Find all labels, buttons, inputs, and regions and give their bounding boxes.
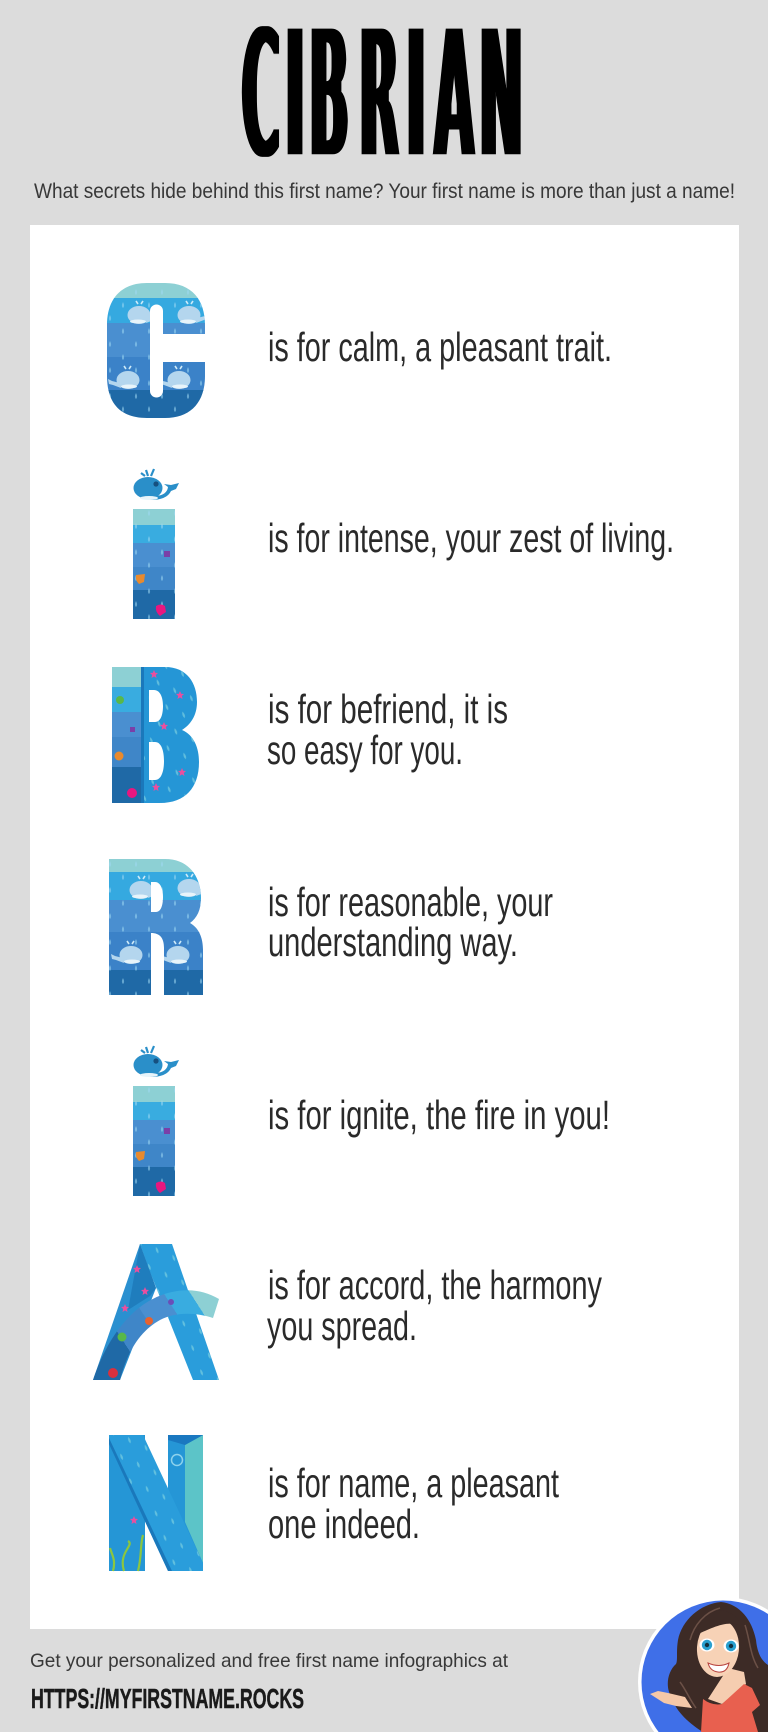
icon: letter B xyxy=(112,667,202,803)
icon: letter R xyxy=(109,859,209,995)
footer text: Get your personalized and free first name infographics at xyxy=(30,1650,509,1672)
icon: whale above first I xyxy=(134,469,179,500)
text: N lines: is for name, a pleasant xyxy=(268,1460,559,1506)
text: R lines xyxy=(268,879,553,965)
icon: letter N xyxy=(109,1435,203,1571)
text: N lines: one indeed. xyxy=(268,1501,420,1547)
icon: second letter I xyxy=(133,1086,175,1196)
icon: letter C xyxy=(107,283,209,418)
icon: whale above second I xyxy=(134,1046,179,1077)
text: B lines xyxy=(267,686,508,773)
icon: letter I xyxy=(133,509,175,619)
text: A lines xyxy=(267,1262,602,1349)
footer url: HTTPS://MYFIRSTNAME.ROCKS xyxy=(31,1683,304,1714)
icon: letter A xyxy=(93,1244,219,1380)
text: C line: is for calm, a pleasant trait. xyxy=(268,324,612,370)
text: B lines: so easy for you. xyxy=(267,727,463,773)
text: R lines: understanding way. xyxy=(268,919,518,965)
text: N lines xyxy=(268,1460,559,1547)
text: A lines: you spread. xyxy=(267,1303,417,1349)
panel: white card xyxy=(30,225,739,1629)
avatar: woman in blue circle xyxy=(638,1597,768,1732)
text: second I line: is for ignite, the fire in you! xyxy=(268,1092,610,1138)
text: R lines: is for reasonable, your xyxy=(268,879,553,925)
text: B lines: is for befriend, it is xyxy=(268,686,508,732)
text: A lines: is for accord, the harmony xyxy=(268,1262,602,1308)
